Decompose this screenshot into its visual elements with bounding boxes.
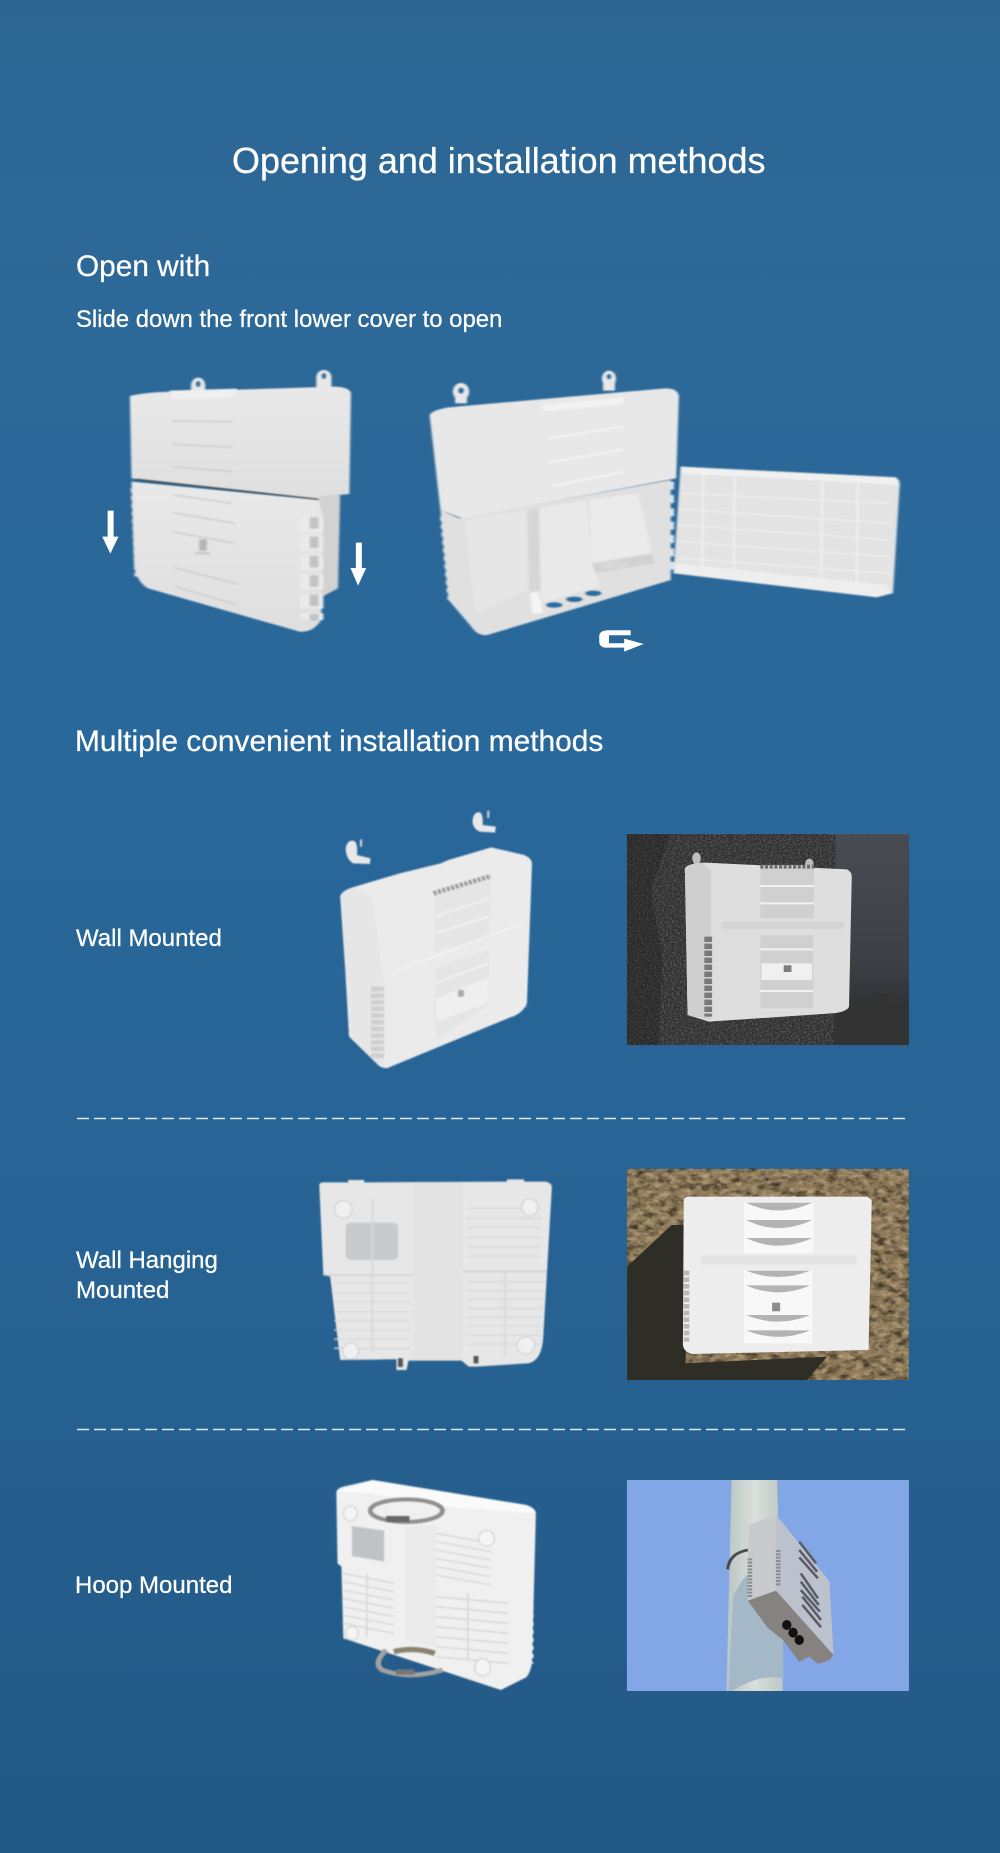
icon: left bracket and screw xyxy=(346,839,371,864)
enclosure xyxy=(748,1514,833,1664)
label: wall hanging mounted: Wall Hanging xyxy=(76,1247,218,1274)
divider xyxy=(77,1118,908,1120)
enclosure xyxy=(130,370,351,632)
heading: open with: Open with xyxy=(76,250,210,283)
label: wall mounted: Wall Mounted xyxy=(76,925,222,952)
ribs xyxy=(323,1198,547,1357)
heading: installation methods: Multiple convenient installation methods xyxy=(75,725,603,758)
label: wall hanging mounted xyxy=(76,1247,218,1304)
arrow: right slide down xyxy=(350,543,366,586)
label: hoop mounted: Hoop Mounted xyxy=(75,1572,232,1599)
divider xyxy=(77,1428,908,1430)
window xyxy=(352,1526,384,1562)
arrow: left slide down xyxy=(102,511,118,554)
figure: closed enclosure sliding down xyxy=(102,370,366,632)
pole xyxy=(727,1480,783,1691)
fixing points xyxy=(335,1199,538,1359)
photo: wall hanging on rough wall xyxy=(627,1169,909,1380)
figure: opened enclosure xyxy=(430,371,900,652)
figure: wall mounted product xyxy=(340,811,532,1068)
fixing points xyxy=(343,1506,494,1676)
photo: wall mounted on dark wall xyxy=(627,834,909,1045)
upper hoop clamp xyxy=(370,1499,443,1522)
arrow: swing open xyxy=(599,630,644,652)
enclosure xyxy=(340,847,532,1068)
text: opening instruction: Slide down the front lower cover to open xyxy=(76,306,502,333)
figure: hoop mounted back view xyxy=(336,1480,536,1690)
figure: wall hanging back view xyxy=(319,1179,552,1370)
enclosure body and cover xyxy=(430,371,900,635)
ribs xyxy=(343,1533,509,1663)
title: Opening and installation methods xyxy=(232,140,765,181)
lower hoop clamp xyxy=(378,1650,443,1675)
clamp xyxy=(728,1550,748,1569)
label: wall hanging mounted: Mounted xyxy=(76,1277,169,1304)
photo: hoop mounted on pole xyxy=(627,1480,909,1691)
window xyxy=(346,1223,398,1260)
icon: right bracket and screw xyxy=(472,811,496,833)
